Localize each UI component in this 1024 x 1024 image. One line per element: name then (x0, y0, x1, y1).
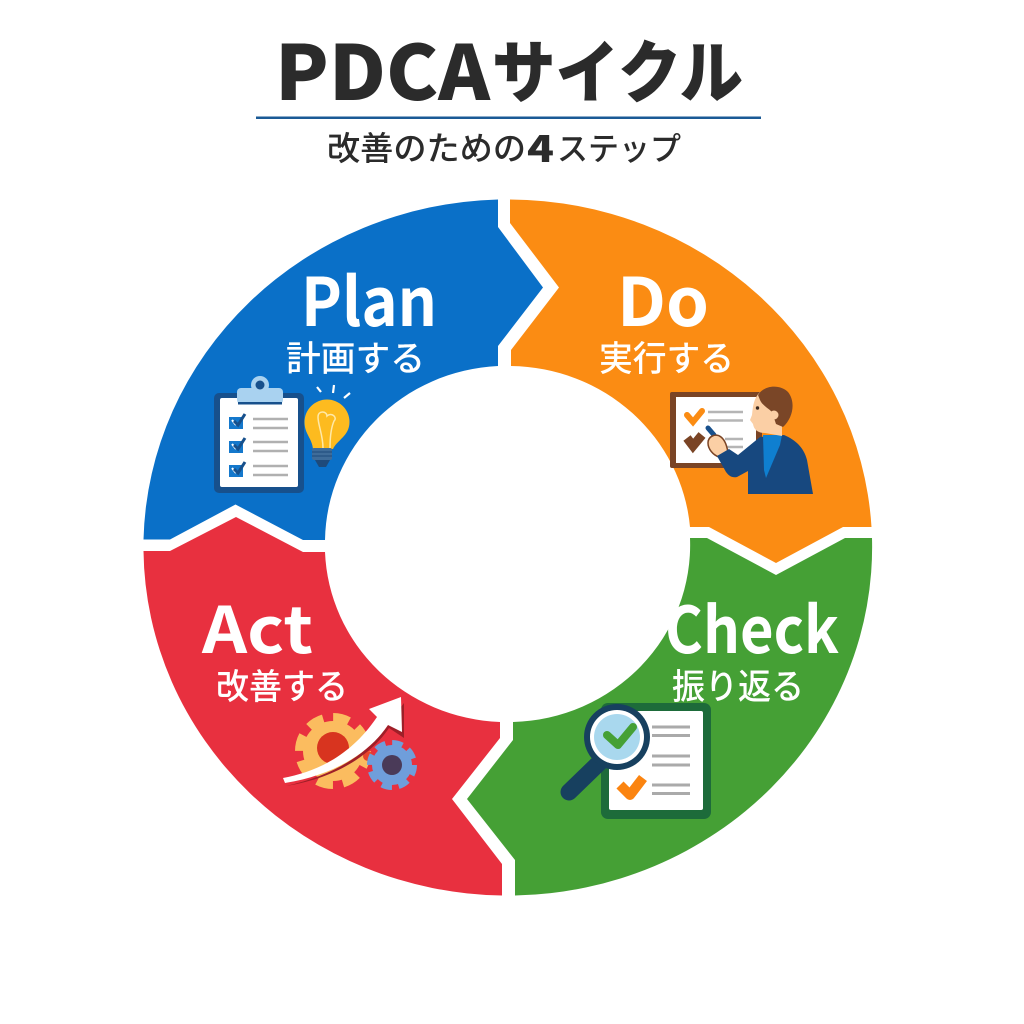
subtitle: 4 (527, 121, 554, 173)
subtitle: 改善のための (327, 122, 526, 170)
act label: Act (201, 580, 313, 672)
plan label: 計画する (286, 331, 425, 382)
check label: 振り返る (672, 659, 804, 710)
subtitle (327, 121, 681, 173)
subtitle: ステップ (557, 124, 681, 170)
act label (201, 580, 348, 710)
icon: checklist with magnifier (569, 703, 711, 819)
check label (665, 580, 839, 710)
title: サイクル (492, 18, 743, 117)
icon: light bulb (304, 385, 350, 467)
title: PDCA (275, 12, 491, 122)
icon: clipboard (214, 376, 304, 493)
do label: 実行する (599, 331, 734, 382)
panel: do segment (510, 200, 872, 563)
do label (599, 249, 734, 382)
plan label (286, 249, 437, 382)
panel: cycle ring (144, 200, 872, 896)
panel: check segment (467, 538, 872, 896)
panel: plan segment (144, 200, 543, 540)
panel: act segment (144, 517, 502, 896)
icon: presenter at board (670, 387, 813, 494)
act label: 改善する (216, 659, 348, 710)
plan label: Plan (301, 249, 437, 346)
do label: Do (617, 249, 709, 346)
title (275, 12, 743, 122)
check label: Check (665, 580, 839, 672)
icon: gears and rising arrow (283, 697, 414, 787)
